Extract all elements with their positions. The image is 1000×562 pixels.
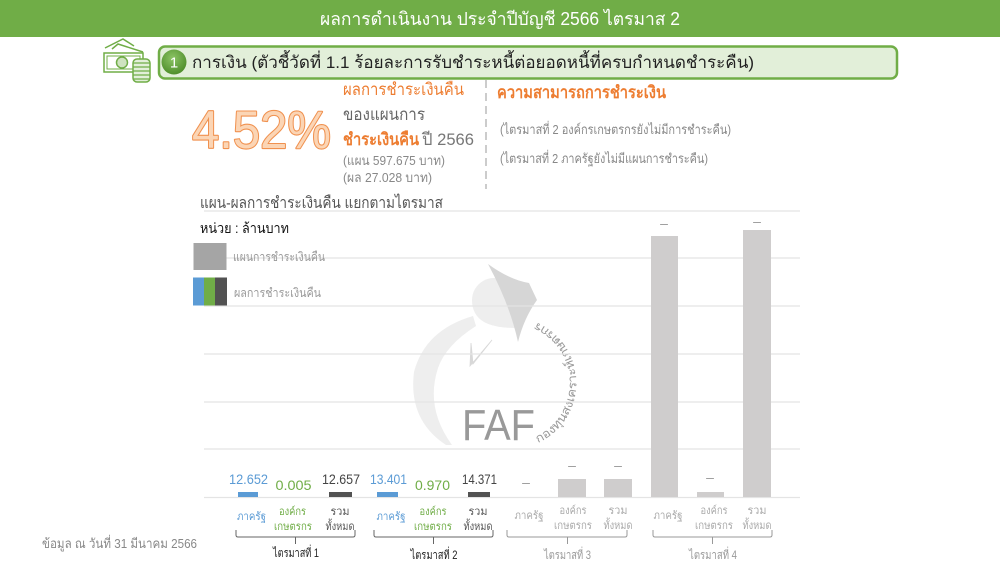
category labels: รวม xyxy=(748,505,766,517)
category labels: ภาครัฐ xyxy=(237,511,266,523)
category labels: ภาครัฐ xyxy=(376,511,406,523)
category labels: เกษตรกร xyxy=(274,521,312,533)
capability notes: (ไตรมาสที่ 2 องค์กรเกษตรกรยังไม่มีการชำระคืน) xyxy=(500,121,731,137)
category labels: ทั้งหมด xyxy=(464,518,492,533)
category labels: รวม xyxy=(330,506,350,518)
capability notes xyxy=(500,121,731,167)
value labels: – xyxy=(753,213,761,229)
legend: แผนการชำระเงินคืน xyxy=(233,250,325,264)
header banner: ผลการดำเนินงาน ประจำปีบัญชี 2566 ไตรมาส 2 xyxy=(320,8,680,29)
category labels: องค์กร xyxy=(279,505,306,518)
legend xyxy=(193,243,325,306)
quarter labels: ไตรมาสที่ 4 xyxy=(688,546,737,562)
value labels xyxy=(229,213,761,493)
category labels: องค์กร xyxy=(700,504,728,517)
section heading bar: การเงิน (ตัวชี้วัดที่ 1.1 ร้อยละการรับชำระหนี้ต่อยอดหนี้ที่ครบกำหนดชำระคืน) xyxy=(192,50,754,72)
category labels: เกษตรกร xyxy=(554,520,592,532)
legend: ผลการชำระเงินคืน xyxy=(234,286,321,300)
value labels: – xyxy=(614,457,622,473)
value labels: – xyxy=(568,457,576,473)
category labels: ภาครัฐ xyxy=(514,510,544,522)
repayment summary text xyxy=(343,80,474,185)
repayment summary text: ชำระเงินคืน xyxy=(343,129,419,149)
value labels: 12.657 xyxy=(322,471,360,487)
category labels: องค์กร xyxy=(560,504,587,517)
capability heading: ความสามารถการชำระเงิน xyxy=(497,83,666,102)
value labels: – xyxy=(706,469,714,485)
value labels: 12.652 xyxy=(229,471,268,487)
header banner xyxy=(0,0,1000,37)
value labels: 14.371 xyxy=(462,471,497,487)
repayment summary text: (แผน 597.675 บาท) xyxy=(343,153,445,168)
quarter labels: ไตรมาสที่ 3 xyxy=(543,546,591,562)
icon: money and coins xyxy=(104,39,150,82)
quarter labels: ไตรมาสที่ 1 xyxy=(272,544,319,560)
repayment summary text: ผลการชำระเงินคืน xyxy=(343,80,464,99)
value labels: 13.401 xyxy=(370,471,407,487)
data date note: ข้อมูล ณ วันที่ 31 มีนาคม 2566 xyxy=(42,535,197,552)
watermark logo xyxy=(413,264,576,450)
number badge xyxy=(162,50,186,74)
category labels: เกษตรกร xyxy=(695,520,733,532)
value labels: 0.970 xyxy=(415,477,450,493)
category labels: รวม xyxy=(468,506,488,518)
number badge: 1 xyxy=(170,54,178,72)
big percent: 4.52% xyxy=(192,101,331,160)
category labels: รวม xyxy=(608,505,628,517)
watermark logo: FAF xyxy=(462,401,535,450)
watermark logo: กองทุนสงเคราะห์เกษตรกร xyxy=(534,323,576,442)
value labels: 0.005 xyxy=(276,477,312,493)
quarter labels: ไตรมาสที่ 2 xyxy=(410,546,458,562)
category labels: เกษตรกร xyxy=(414,521,452,533)
category labels: ภาครัฐ xyxy=(654,510,682,522)
category labels: ทั้งหมด xyxy=(604,517,632,532)
capability notes: (ไตรมาสที่ 2 ภาครัฐยังไม่มีแผนการชำระคืน) xyxy=(500,150,708,167)
value labels: – xyxy=(660,215,668,231)
section heading bar xyxy=(159,46,897,78)
category labels: ทั้งหมด xyxy=(326,518,354,533)
category labels xyxy=(237,504,772,533)
chart title: แผน-ผลการชำระเงินคืน แยกตามไตรมาส xyxy=(200,193,443,212)
category labels: ทั้งหมด xyxy=(742,517,772,532)
quarter labels xyxy=(272,544,737,562)
repayment summary text: ของแผนการ xyxy=(343,105,425,124)
value labels: – xyxy=(522,474,530,490)
category labels: องค์กร xyxy=(420,505,447,518)
repayment summary text: (ผล 27.028 บาท) xyxy=(343,170,432,185)
repayment summary text: ปี 2566 xyxy=(421,130,474,149)
unit label: หน่วย : ล้านบาท xyxy=(200,220,289,236)
bars: results and plans xyxy=(238,230,771,497)
quarter brackets xyxy=(236,530,772,544)
